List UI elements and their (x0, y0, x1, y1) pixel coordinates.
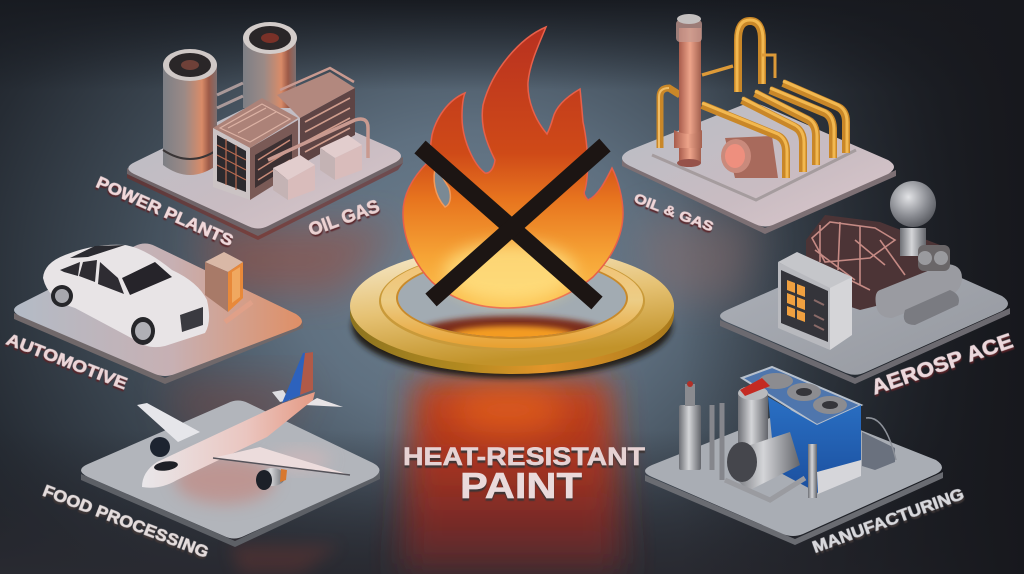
compressor (712, 378, 817, 500)
title (403, 443, 645, 506)
side unit (862, 418, 896, 470)
airplane (137, 352, 350, 490)
left pipe (659, 88, 680, 148)
label: oil and gas: OIL & GAS (632, 189, 716, 235)
flame cutout (434, 165, 450, 207)
control box (778, 252, 852, 350)
storage tanks (163, 22, 297, 175)
engine (806, 181, 962, 325)
base frame (652, 150, 856, 200)
column (674, 14, 702, 167)
panel: power plants (127, 22, 403, 240)
flame (403, 27, 623, 308)
label: power plants: POWER PLANTS (93, 173, 236, 250)
label: automotive: AUTOMOTIVE (4, 330, 130, 393)
near wing (213, 447, 350, 475)
stabilizer (305, 398, 343, 407)
panel: oil and gas (622, 14, 896, 234)
near engine (256, 468, 287, 490)
flame glow (444, 242, 576, 302)
crossed bars (420, 145, 605, 303)
platform (720, 244, 1010, 384)
label: food processing: FOOD PROCESSING (40, 481, 211, 562)
white boxes (273, 135, 362, 200)
panel: food processing (81, 352, 380, 547)
cylinder (679, 381, 701, 470)
platform (622, 104, 896, 234)
label: oil gas: OIL GAS (306, 196, 382, 240)
panel: automotive (14, 244, 303, 384)
golden pipes (702, 20, 847, 178)
machinery (213, 68, 368, 200)
platform (81, 400, 380, 547)
label: aerospace: AEROSP ACE (868, 330, 1016, 399)
fuselage (142, 392, 315, 488)
gold ring (350, 246, 674, 378)
blue tank (742, 367, 861, 494)
tail fin (282, 352, 313, 403)
far engine (150, 437, 170, 457)
platform (127, 98, 403, 240)
title line 2: PAINT (460, 465, 582, 506)
label: manufacturing: MANUFACTURING (810, 484, 967, 557)
title line 1: HEAT-RESISTANT (403, 443, 645, 471)
central emblem: crossed out flame on gold ring (350, 27, 674, 378)
platform (645, 408, 943, 545)
car (43, 245, 209, 347)
pump (721, 136, 778, 178)
panel: aerospace (720, 181, 1010, 384)
cockpit (153, 460, 179, 472)
panel: manufacturing (645, 367, 943, 545)
transformer (205, 252, 252, 322)
platform (14, 244, 303, 384)
far wing (137, 403, 200, 442)
